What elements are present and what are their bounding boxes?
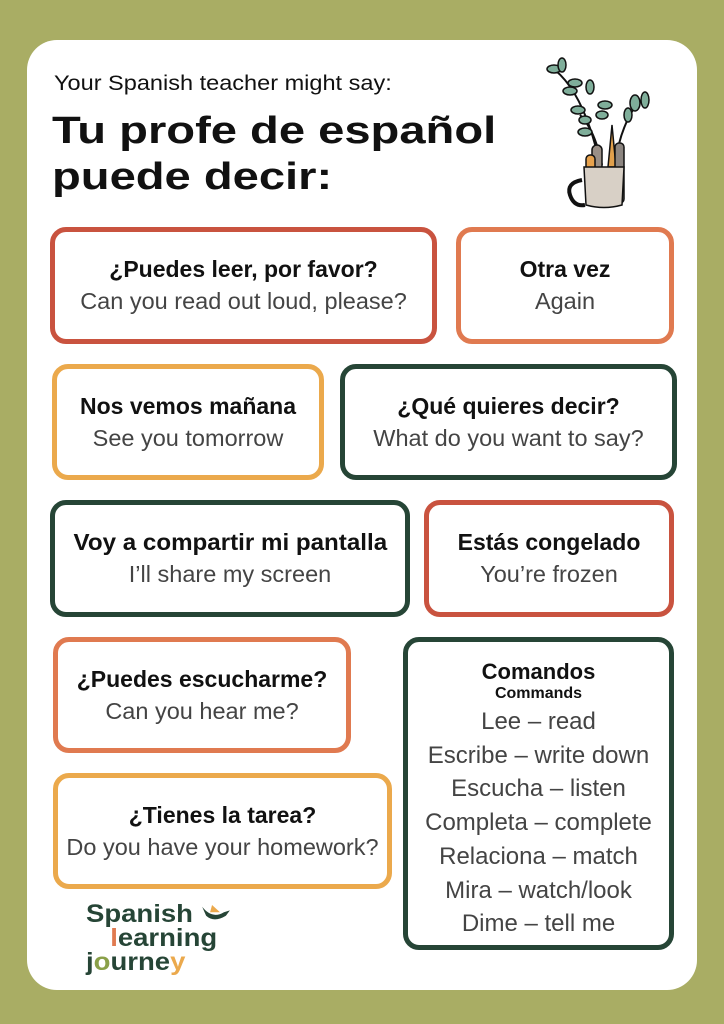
box: Voy a compartir — [50, 500, 410, 617]
box: Comandos: Commands — [495, 685, 582, 702]
box: Qué quieres decir: ¿Qué quieres decir? — [397, 392, 620, 418]
box: Puedes escucharme: Can you hear me? — [105, 698, 299, 724]
logo: learning — [110, 924, 217, 952]
box: Estás congelado: You’re frozen — [480, 561, 618, 587]
icon: pencil mug plant — [546, 57, 650, 208]
box: Otra vez — [456, 227, 674, 344]
subtitle: Your Spanish teacher might say: — [54, 72, 392, 95]
box: Qué quieres decir: What do you want to say? — [373, 424, 644, 450]
box: Comandos: Completa – complete — [425, 809, 652, 836]
title: puede decir: — [52, 156, 332, 198]
icon: bird — [202, 905, 230, 920]
box: Nos vemos mañana: See you tomorrow — [93, 424, 283, 450]
box: Voy a compartir: Voy a compartir mi pantalla — [73, 529, 387, 555]
box: Comandos — [403, 637, 674, 950]
box: Qué quieres decir — [340, 364, 677, 480]
logo — [86, 900, 230, 976]
box: Puedes leer: ¿Puedes leer, por favor? — [109, 256, 378, 282]
logo: journey — [86, 948, 185, 976]
box: Comandos: Relaciona – match — [439, 843, 638, 870]
box: Comandos: Dime – tell me — [462, 910, 615, 937]
box: Puedes escucharme — [53, 637, 351, 753]
box: Voy a compartir: I’ll share my screen — [129, 561, 331, 587]
box: Comandos: Mira – watch/look — [445, 877, 632, 904]
box: Comandos: Lee – read — [481, 708, 596, 735]
box: Puedes escucharme: ¿Puedes escucharme? — [77, 666, 327, 692]
box: Comandos: Escucha – listen — [451, 775, 626, 802]
box: Otra vez: Otra vez — [520, 256, 610, 282]
logo: Spanish — [86, 900, 193, 928]
box: Puedes leer: Can you read out loud, please? — [80, 288, 407, 314]
box: Comandos: Comandos — [482, 659, 595, 684]
box: Nos vemos mañana: Nos vemos mañana — [80, 392, 296, 418]
box: Estás congelado: Estás congelado — [458, 529, 640, 555]
box: Otra vez: Again — [535, 288, 595, 314]
box: Puedes leer — [50, 227, 437, 344]
box: Nos vemos mañana — [52, 364, 324, 480]
box: Estás congelado — [424, 500, 674, 617]
box: Comandos: Escribe – write down — [428, 742, 649, 769]
box: Tienes la tarea: ¿Tienes la tarea? — [129, 802, 316, 828]
box: Tienes la tarea — [53, 773, 392, 889]
title: Tu profe de español — [52, 110, 496, 152]
title — [52, 110, 496, 198]
box: Tienes la tarea: Do you have your homework? — [66, 834, 379, 860]
